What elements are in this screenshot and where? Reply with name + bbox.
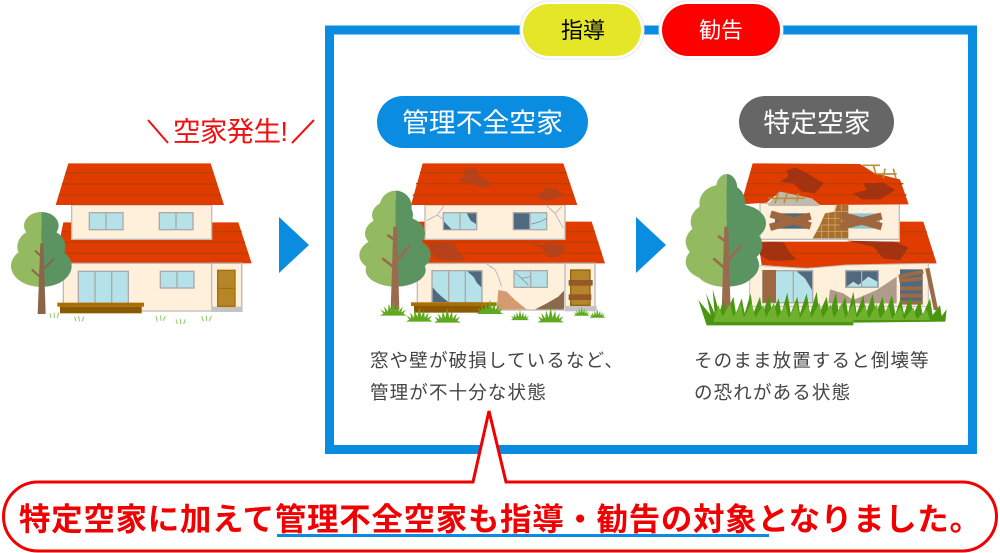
wall cracks bbox=[487, 264, 502, 287]
upper wall bbox=[760, 203, 899, 239]
upper roof damage bbox=[458, 168, 563, 200]
upper windows bbox=[89, 213, 193, 230]
collapsed wall bbox=[828, 277, 897, 303]
house: specified vacant house bbox=[686, 163, 947, 325]
exposed lath wall bbox=[813, 205, 848, 238]
lower roof bbox=[418, 222, 605, 263]
label: 管理不全空家: 管理不全空家 bbox=[402, 108, 563, 138]
collapsed wall bbox=[497, 290, 564, 309]
upper wall cracks bbox=[427, 206, 563, 228]
lower wall bbox=[63, 263, 242, 311]
label: 管理不全空家 bbox=[377, 96, 588, 148]
lower roof bbox=[55, 222, 252, 263]
broken large window bbox=[432, 271, 482, 303]
upper wall bbox=[425, 205, 565, 239]
callout: red speech bubble bbox=[3, 411, 996, 551]
small window bbox=[160, 271, 194, 288]
exposed attic behind roof hole bbox=[768, 192, 820, 206]
tree bbox=[686, 174, 766, 310]
callout text with underline: 特定空家に加えて管理不全空家も指導・勧告の対象となりました。 bbox=[19, 501, 981, 537]
large window and board bbox=[763, 270, 813, 303]
upper wall bbox=[72, 205, 212, 239]
text: 特定空家 description: の恐れがある状態 bbox=[694, 382, 851, 403]
tree bbox=[359, 191, 432, 310]
boarded door bbox=[899, 268, 936, 310]
lower wall bbox=[749, 263, 928, 307]
text: 特定空家 description: そのまま放置すると倒壊等 bbox=[694, 350, 930, 371]
badge: 指導: 指導 bbox=[561, 18, 605, 43]
boarded door bbox=[569, 270, 593, 305]
house: poorly managed vacant house bbox=[359, 163, 605, 323]
label: 特定空家 bbox=[739, 96, 894, 148]
overgrown grass bbox=[698, 289, 947, 325]
grass tufts bbox=[380, 299, 605, 323]
boarded windows bbox=[770, 213, 882, 229]
heading: 空家発生 bbox=[148, 116, 314, 147]
badge: 勧告 bbox=[659, 1, 783, 59]
door bbox=[218, 270, 235, 306]
text: 管理不全空家 description: 管理が不十分な状態 bbox=[370, 382, 547, 403]
upper roof with hole bbox=[741, 163, 909, 205]
deck bbox=[57, 303, 144, 313]
text: 管理不全空家 description: 窓や壁が破損しているなど、 bbox=[370, 350, 624, 371]
exposed rafters bbox=[768, 165, 897, 203]
cracked small window bbox=[514, 271, 547, 287]
lower roof damage bbox=[428, 242, 567, 261]
upper roof bbox=[56, 163, 224, 205]
lower roof damage bbox=[758, 241, 908, 261]
upper roof damage bbox=[780, 167, 895, 199]
tree bbox=[11, 212, 72, 314]
badge: 勧告: 勧告 bbox=[699, 18, 743, 43]
upper windows bbox=[443, 213, 547, 230]
lower wall bbox=[417, 263, 595, 310]
heading: 空家発生: 空家発生! bbox=[173, 116, 288, 147]
panel: 指導・勧告 blue frame bbox=[330, 30, 972, 450]
deck bbox=[411, 302, 497, 313]
house: normal vacant house bbox=[11, 163, 252, 324]
upper roof bbox=[411, 163, 577, 205]
arrow: to 特定空家 bbox=[636, 217, 666, 273]
broken small window bbox=[846, 271, 878, 287]
large window bbox=[78, 271, 128, 303]
lower roof bbox=[758, 222, 937, 268]
grass bbox=[50, 313, 211, 324]
badge: 指導 bbox=[520, 1, 644, 59]
label: 特定空家: 特定空家 bbox=[763, 108, 871, 138]
arrow: to 管理不全空家 bbox=[279, 217, 309, 273]
